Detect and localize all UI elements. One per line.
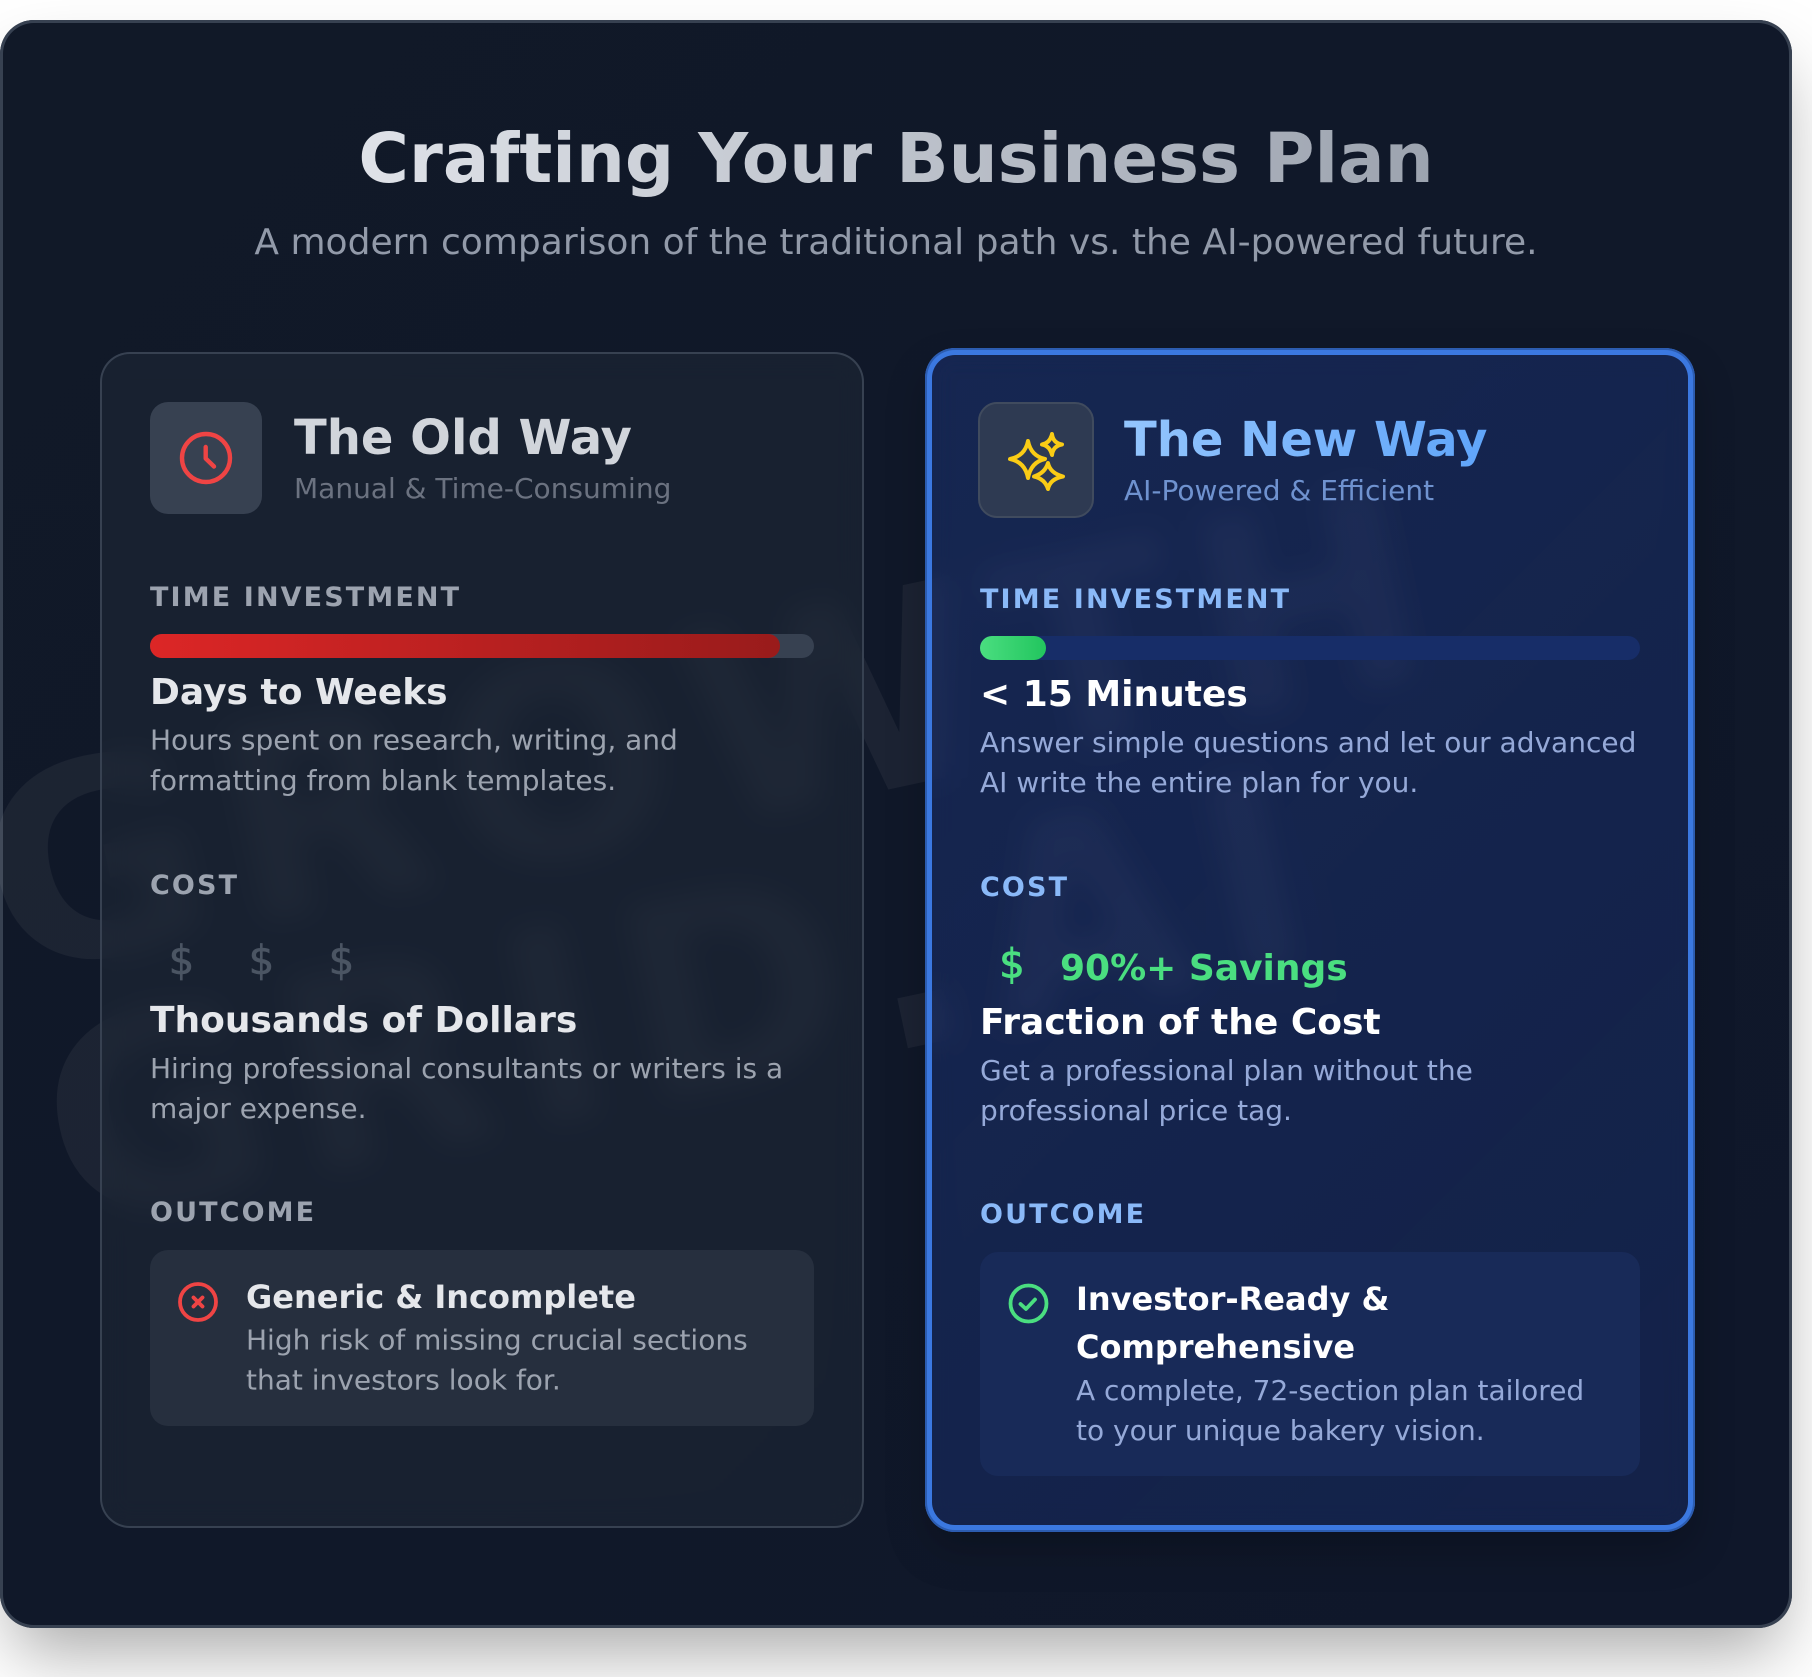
section: cost: Fraction of the Cost <box>980 1002 1381 1043</box>
section: outcome: to your unique bakery vision. <box>1076 1414 1485 1447</box>
section: time investment: TIME INVESTMENT <box>150 582 461 613</box>
section: cost: COST <box>980 872 1069 903</box>
section: cost: 90%+ Savings <box>1060 948 1348 989</box>
section: outcome: OUTCOME <box>150 1197 316 1228</box>
icon: sparkles <box>979 403 1093 517</box>
icon: check circle <box>1010 1286 1046 1322</box>
section: time investment <box>980 584 1640 799</box>
icon: x circle <box>180 1284 216 1320</box>
section: cost: $ <box>169 938 194 984</box>
section: cost: $ <box>329 938 354 984</box>
section: time investment: Days to Weeks <box>150 672 448 713</box>
section: outcome: Generic & Incomplete <box>246 1278 636 1316</box>
section: cost: $ <box>249 938 274 984</box>
section: outcome: A complete, 72-section plan tailored <box>1076 1374 1584 1407</box>
section: time investment: formatting from blank templates. <box>150 764 616 797</box>
section: cost: major expense. <box>150 1092 367 1125</box>
panel: the old way <box>100 352 864 1528</box>
section: time investment: AI write the entire plan for you. <box>980 766 1418 799</box>
title: Crafting Your Business Plan <box>358 119 1434 199</box>
section: outcome: OUTCOME <box>980 1199 1146 1230</box>
section: cost: COST <box>150 870 239 901</box>
section: time investment: TIME INVESTMENT <box>980 584 1291 615</box>
section: outcome: that investors look for. <box>246 1364 561 1396</box>
watermark text: GRID.AI <box>15 711 1354 1290</box>
title: A modern comparison of the traditional path vs. the AI-powered future. <box>254 222 1538 263</box>
section: time investment: < 15 Minutes <box>980 674 1248 715</box>
heading: the new way: The New Way <box>1124 412 1487 468</box>
section: outcome <box>980 1199 1640 1476</box>
section: cost <box>150 870 783 1125</box>
section: cost <box>980 872 1473 1127</box>
section: outcome: Comprehensive <box>1076 1328 1355 1366</box>
panel: the new way <box>925 348 1695 1532</box>
title <box>254 119 1538 263</box>
section: cost: professional price tag. <box>980 1094 1292 1127</box>
icon: clock <box>150 402 262 514</box>
section: cost: Thousands of Dollars <box>150 1000 577 1041</box>
heading: the new way <box>1124 412 1487 507</box>
section: cost: $ <box>999 942 1025 988</box>
section: outcome: High risk of missing crucial sections <box>246 1324 748 1356</box>
section: cost: Hiring professional consultants or writers is a <box>150 1052 783 1085</box>
section: outcome: Investor-Ready & <box>1076 1280 1389 1318</box>
section: time investment: Answer simple questions and let our advanced <box>980 726 1636 759</box>
section: time investment: Hours spent on research, writing, and <box>150 724 678 756</box>
section: outcome <box>150 1197 814 1426</box>
heading: the new way: AI-Powered & Efficient <box>1124 474 1434 507</box>
section: time investment <box>150 582 814 797</box>
heading: the old way <box>294 410 671 505</box>
section: cost: Get a professional plan without the <box>980 1054 1473 1087</box>
heading: the old way: Manual & Time-Consuming <box>294 472 671 505</box>
heading: the old way: The Old Way <box>294 410 632 466</box>
